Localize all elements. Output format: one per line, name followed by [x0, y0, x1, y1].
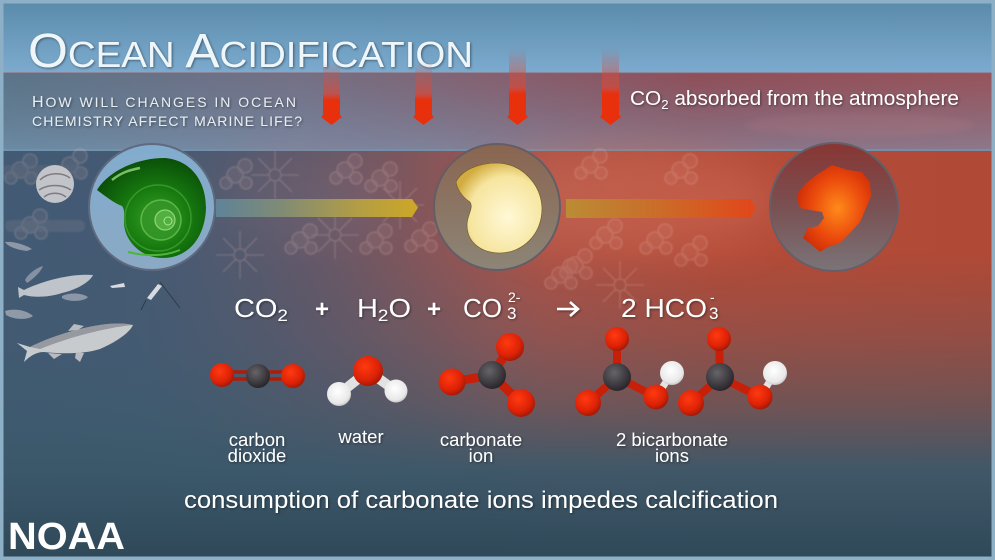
label: carbonate ion: ion [469, 445, 493, 466]
molecule: carbonate ion [438, 333, 535, 417]
label: bicarbonate ions [616, 429, 728, 466]
label: carbon dioxide [228, 429, 286, 466]
panel: weakened shell [434, 144, 560, 270]
subtitle question: HOW WILL CHANGES IN OCEAN [32, 94, 296, 111]
label: carbonate ion: carbonate [440, 429, 522, 450]
CO2 label: CO [630, 87, 661, 110]
molecule: carbon dioxide [210, 363, 305, 388]
conclusion text: consumption of carbonate ions impedes calcification [184, 487, 778, 514]
formula: carbonate: 2- [508, 289, 521, 305]
icon: dissolving shell [797, 165, 871, 252]
background: atmosphere sky [0, 0, 995, 73]
formula: carbon dioxide: CO [234, 293, 273, 323]
CO2 label: 2 [661, 97, 669, 112]
molecule: water [327, 356, 408, 406]
arrow: reaction [557, 302, 578, 316]
background: ocean surface band [0, 72, 995, 151]
subtitle question: CHEMISTRY AFFECT MARINE LIFE? [32, 113, 302, 129]
formula: bicarbonate: - [710, 289, 715, 305]
icon: pale shell [456, 163, 542, 253]
label: water: water [337, 426, 384, 447]
icon: coccolith [36, 165, 74, 203]
icon: green shell [97, 158, 206, 258]
formula: bicarbonate: 2 HCO [621, 293, 707, 323]
plus: + [427, 296, 441, 323]
CO2 absorption arrows [321, 48, 621, 125]
label: carbon dioxide: dioxide [228, 445, 286, 466]
formula: carbonate: CO [463, 293, 502, 323]
label: bicarbonate ions: 2 bicarbonate [616, 429, 728, 450]
plus: + [315, 296, 329, 323]
arrow: healthy to weakened shell [216, 199, 418, 217]
formula: water: 2 [378, 306, 388, 325]
NOAA logo: NOAA [8, 516, 125, 558]
molecule: bicarbonate 2 [678, 327, 787, 416]
arrow: CO2 down 2 [413, 62, 434, 125]
formula: carbonate: 3 [507, 304, 516, 323]
title: OCEAN ACIDIFICATION [28, 25, 473, 78]
formula: water: H [357, 293, 376, 323]
label: bicarbonate ions: ions [655, 445, 689, 466]
equation [234, 289, 718, 325]
icon: small fish [5, 242, 88, 319]
icon: krill [110, 282, 180, 310]
formula: water: O [388, 293, 411, 323]
arrow: CO2 down 4 [600, 48, 621, 125]
icon: medium fish [18, 275, 93, 298]
plankton texture [0, 149, 707, 309]
subtitle question [32, 94, 302, 129]
label: carbon dioxide: carbon [229, 429, 285, 450]
panel: healthy shell [89, 144, 215, 270]
arrow: CO2 down 3 [507, 48, 528, 125]
molecule: bicarbonate 1 [575, 327, 684, 416]
icon: large fish [17, 324, 133, 362]
panel: dissolved shell [770, 143, 898, 271]
formula: bicarbonate: 3 [709, 304, 718, 323]
CO2 label: absorbed from the atmosphere [669, 87, 959, 110]
background: deep ocean [0, 150, 995, 560]
formula: carbon dioxide: 2 [277, 306, 288, 325]
arrow: weakened to dissolved shell [566, 199, 756, 218]
label: carbonate ion [440, 429, 522, 466]
arrow: CO2 down 1 [321, 62, 342, 125]
formula: carbonate [463, 289, 521, 323]
